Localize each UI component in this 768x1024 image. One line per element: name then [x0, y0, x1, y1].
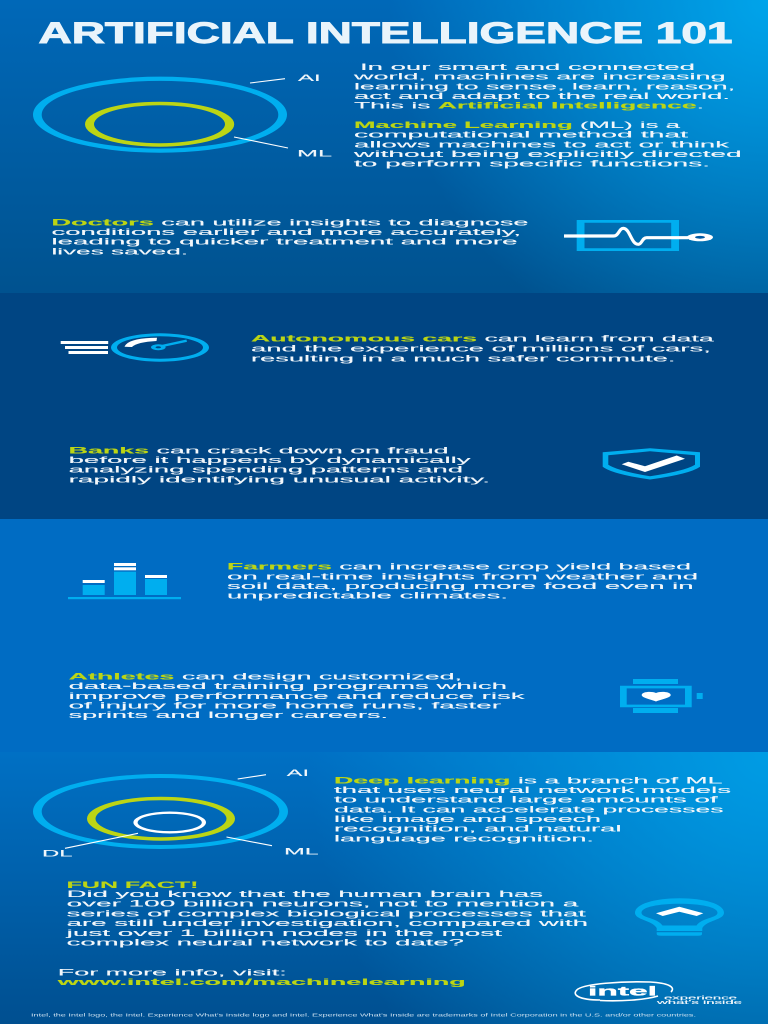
icon: speedometer [61, 333, 209, 362]
DL ring [133, 812, 206, 834]
text: athletes: Athletes can design customized, [69, 670, 462, 681]
DL leader line [65, 833, 138, 848]
logo: intel [575, 982, 742, 1006]
text: artificial intelligence intro [351, 61, 735, 111]
text: banks: rapidly identifying unusual activity. [69, 473, 490, 484]
text: artificial intelligence intro: world, machines are increasing [351, 71, 726, 82]
text: deep learning: like image and speech [334, 813, 601, 824]
text: machine learning definition: without being explicitly directed [351, 148, 742, 159]
ML leader line [234, 137, 288, 148]
ML leader line [226, 837, 272, 846]
AI ring [33, 77, 287, 153]
fun fact body: series of complex biological processes that [67, 907, 587, 918]
icon: shield with check [603, 448, 700, 480]
text: machine learning definition: allows machines to act or think [354, 138, 730, 149]
text: doctors [52, 217, 528, 256]
footer: legal text: Intel, the Intel logo, the Intel. Experience What's Inside logo and Intel. Experience What's Inside are trademarks of Intel Corporation in the U.S. and/or other countries. [31, 1012, 696, 1018]
text: autonomous cars: and the experience of millions of cars, [251, 343, 711, 354]
text: more info: For more info, visit: [58, 966, 287, 978]
panel: farmers and athletes background [0, 519, 768, 752]
fun fact heading: FUN FACT! [67, 879, 198, 890]
text: athletes: data-based training programs which [69, 680, 507, 691]
panel: intro background [0, 0, 768, 293]
panel: cars and banks background [0, 293, 768, 519]
text: farmers [227, 561, 698, 601]
AI leader line [250, 79, 285, 83]
text: deep learning: language recognition. [334, 832, 594, 843]
ML label: ML [297, 148, 332, 158]
fun fact body: complex neural network to date? [67, 936, 464, 947]
text: artificial intelligence intro: In our smart and connected [360, 61, 695, 72]
text: deep learning: that uses neural network models [334, 784, 732, 795]
text: farmers: on real-time insights from weather and [227, 570, 698, 581]
text: farmers: Farmers can increase crop yield based [227, 561, 691, 572]
text: deep learning: Deep learning is a branch of ML [334, 774, 722, 785]
text: banks: Banks can crack down on fraud [69, 444, 449, 455]
text: machine learning definition: to perform specific functions. [354, 158, 710, 169]
fun fact body: are still under investigation, compared with [67, 917, 588, 928]
AI ring [33, 774, 288, 849]
fun fact body: just over 1 billion nodes in the most [64, 927, 503, 938]
text: banks: before it happens by dynamically [69, 454, 471, 465]
text: doctors: Doctors can utilize insights to diagnose [52, 217, 528, 228]
icon: light bulb [635, 898, 724, 936]
icon: heartbeat monitor [564, 220, 713, 251]
text: deep learning: data. It can accelerate processes [334, 803, 724, 814]
text: athletes: sprints and longer careers. [69, 709, 388, 720]
fun fact body: over 100 billion neurons, not to mention a [67, 898, 581, 909]
logo: intel: what's inside [654, 1000, 742, 1006]
text: doctors: leading to quicker treatment and more [52, 236, 518, 247]
panel: deep learning background [0, 752, 768, 1024]
icon: smartwatch with heart [620, 679, 703, 713]
AI label: AI [298, 72, 321, 83]
AI leader line [238, 775, 266, 779]
text: machine learning definition: computational method that [354, 129, 689, 140]
text: fun fact [64, 879, 588, 947]
text: athletes [69, 670, 525, 720]
icon: bar chart [68, 563, 181, 599]
text: machine learning definition: Machine Learning (ML) is a [354, 119, 682, 130]
fun fact body: Did you know that the human brain has [67, 888, 544, 899]
text: autonomous cars [251, 333, 716, 363]
text: doctors: lives saved. [52, 245, 188, 256]
text: artificial intelligence intro: act and adapt to the real world. [354, 90, 730, 101]
text: autonomous cars: resulting in a much safer commute. [251, 352, 676, 363]
fun fact body [64, 888, 588, 947]
text: deep learning [334, 774, 732, 843]
text: deep learning: recognition, and natural [334, 823, 622, 834]
text: machine learning definition [351, 119, 742, 169]
diagram: AI, ML and DL rings [33, 767, 319, 858]
logo: intel: intel [588, 984, 657, 998]
AI label: AI [287, 767, 309, 778]
text: doctors: conditions earlier and more accurately, [52, 226, 521, 237]
title: ARTIFICIAL INTELLIGENCE 101 [38, 17, 732, 50]
text: banks [69, 444, 490, 484]
diagram: AI and ML rings [33, 72, 332, 158]
text: more info [55, 966, 466, 987]
ML ring [85, 102, 234, 147]
ML label: ML [284, 846, 319, 856]
text: farmers: soil data, producing more food even in [227, 580, 694, 591]
text: artificial intelligence intro: This is Artificial Intelligence . [354, 100, 704, 111]
logo: intel: experience [664, 995, 737, 1001]
text: more info: www.intel.com/machinelearning [55, 976, 466, 987]
text: banks: analyzing spending patterns and [69, 464, 463, 475]
text: artificial intelligence intro: learning to sense, learn, reason, [354, 80, 735, 91]
text: athletes: of injury for more home runs, faster [69, 699, 501, 710]
text: autonomous cars: Autonomous cars can learn from data [251, 333, 716, 344]
text: farmers: unpredictable climates. [227, 590, 508, 601]
text: deep learning: to understand large amounts of [334, 794, 719, 805]
DL label: DL [42, 848, 72, 858]
text: athletes: improve performance and reduce risk [69, 690, 525, 701]
ML ring [87, 797, 235, 841]
